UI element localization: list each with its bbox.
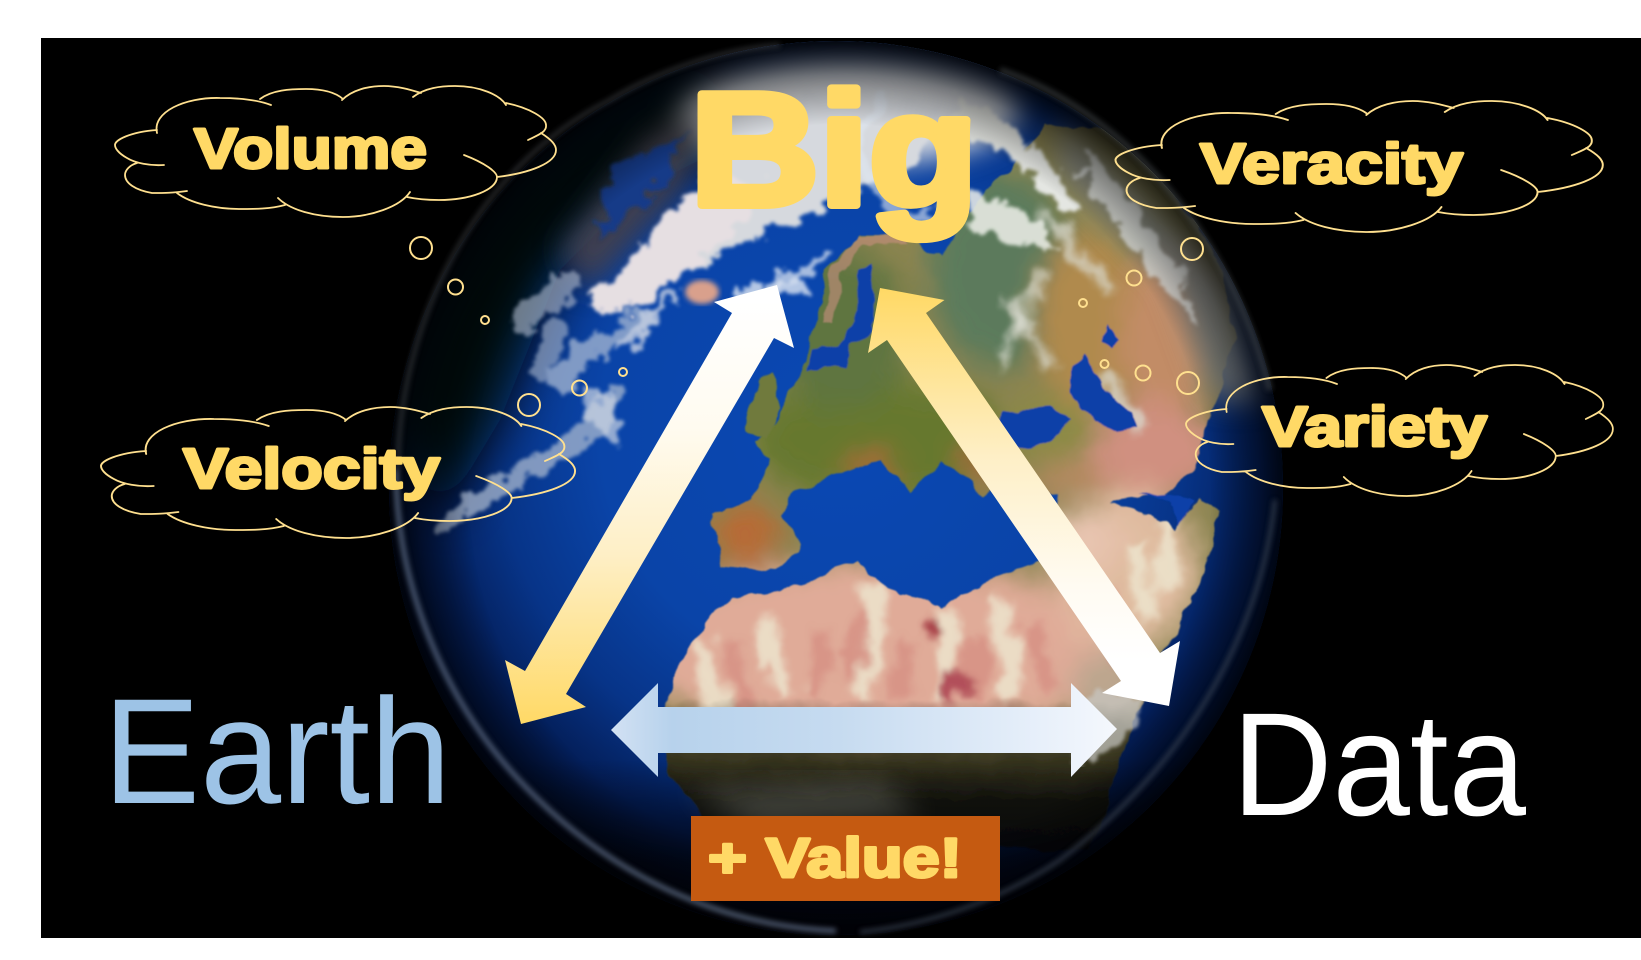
polar ice and cloud bands [560,55,1262,400]
atmosphere rim [396,45,1275,932]
arrow: Big to Data [868,288,1180,706]
cloud: Veracity: Veracity [1200,132,1463,196]
hazy cloud over equatorial Africa [699,771,918,816]
Iceland [685,280,719,304]
sub-Saharan shadow [665,698,1142,853]
Scandinavian coast tint [827,240,905,324]
callout: + Value!: + Value! [708,826,962,889]
cloud: Volume [115,86,556,217]
label: Data: Data [1232,683,1526,847]
land masses [664,123,1237,852]
cloud: Volume: Volume [194,117,427,181]
thought bubbles: right [1079,238,1203,394]
globe image of the Earth [380,41,1320,950]
label: Earth: Earth [103,667,451,835]
arrow: Big to Earth [505,285,794,724]
cloud: Variety [1186,365,1613,496]
darkened southern limb [550,771,1132,935]
Britain and Ireland [745,372,782,436]
dark upper-left limb [391,64,716,530]
cloud: Variety: Variety [1262,395,1487,459]
callout: + Value! [691,816,1000,901]
cloud: Velocity: Velocity [183,437,440,501]
seas [806,262,1196,526]
limb shading [389,41,1283,935]
arrow: Earth to Data [611,683,1117,777]
cloud over the Horn of Africa [1075,690,1150,760]
cloud: Veracity [1116,101,1603,232]
title: Big: Big [690,60,978,240]
thought bubbles: left [410,237,627,416]
cloud: Velocity [101,407,575,538]
